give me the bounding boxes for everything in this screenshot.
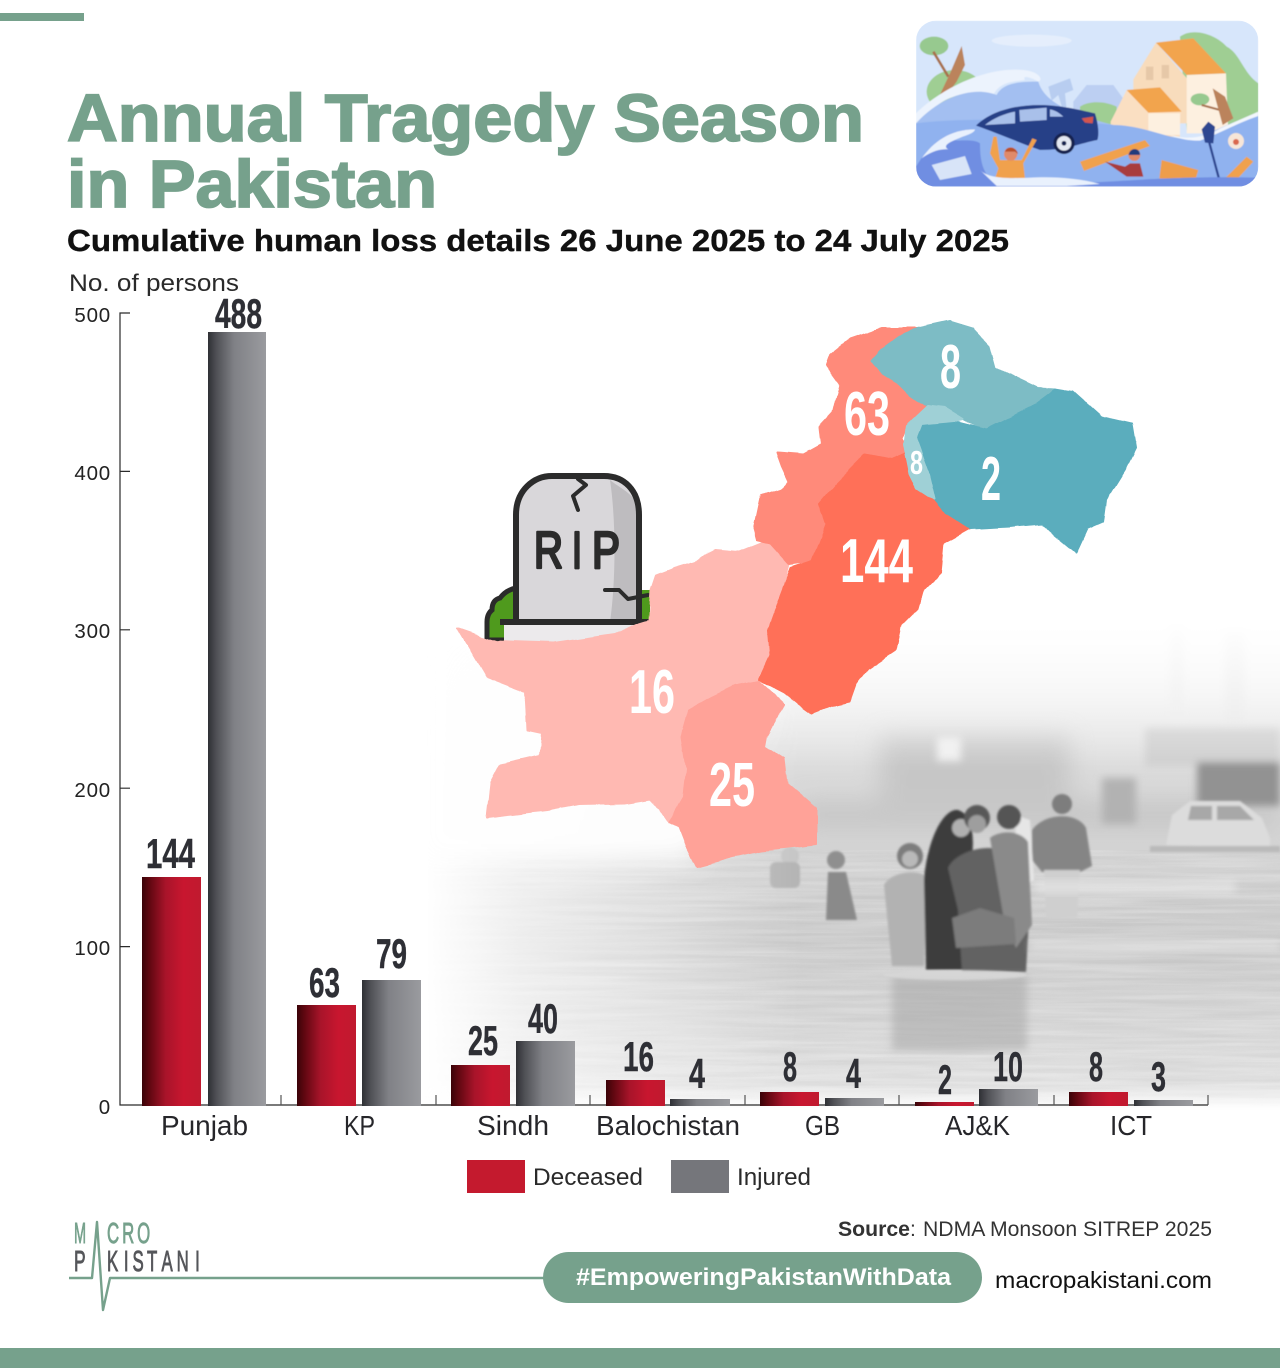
logo: Macro Pakistani with pulse line: P: [74, 1246, 86, 1278]
bar chart: value labels: 4: [846, 1050, 861, 1097]
photo: blurred trees and street: [800, 735, 1280, 830]
bar chart: category labels: AJ&K: [945, 1110, 1010, 1141]
bar chart: value labels: [146, 290, 1166, 1103]
subtitle: Cumulative human loss details 26 June 2025 to 24 July 2025: [67, 223, 1009, 258]
bar chart: category labels: [161, 1110, 1152, 1141]
bar chart: category labels: GB: [805, 1110, 840, 1141]
bar chart: value labels: 488: [215, 290, 262, 337]
logo: Macro Pakistani with pulse line: CRO: [107, 1219, 150, 1250]
logo: Macro Pakistani with pulse line: [69, 1216, 545, 1310]
bar chart: value labels: 79: [376, 930, 407, 977]
legend: Deceased: [533, 1164, 643, 1191]
icon: flood illustration: [916, 21, 1258, 187]
title: Annual Tragedy Season: [67, 81, 864, 156]
logo: Macro Pakistani with pulse line: M: [74, 1216, 86, 1249]
map values: 144: [840, 527, 913, 596]
bar chart: value labels: 2: [938, 1056, 952, 1103]
y axis title: No. of persons: [69, 270, 239, 297]
y axis tick labels: 100: [74, 937, 111, 960]
map region: Islamabad Capital Territory: [906, 408, 965, 501]
photo: water reflection: [892, 975, 1027, 1050]
map region: Khyber Pakhtunkhwa: [756, 330, 929, 566]
map region: Balochistan: [459, 541, 791, 823]
title: in Pakistan: [67, 147, 437, 222]
bar chart: category labels: Punjab: [161, 1110, 248, 1141]
legend: Injured: [737, 1164, 811, 1191]
map values: 63: [844, 380, 890, 449]
icon: RIP gravestone: I: [572, 522, 582, 580]
map values: 16: [629, 658, 675, 727]
bar chart: value labels: 3: [1151, 1053, 1166, 1100]
photo: shopfront: [934, 728, 1280, 826]
bar chart: value labels: 63: [309, 959, 340, 1006]
bar chart: category labels: ICT: [1110, 1110, 1152, 1141]
legend: [467, 1160, 811, 1193]
map region: Punjab: [761, 454, 972, 715]
map values: 25: [709, 751, 755, 820]
bar chart: value labels: 144: [146, 830, 195, 877]
map region: Gilgit-Baltistan: [873, 323, 1057, 431]
photo: parked car: [1150, 801, 1280, 852]
bar chart: value labels: 16: [623, 1033, 654, 1080]
bar chart: bars: [142, 332, 1193, 1106]
hashtag pill: #EmpoweringPakistanWithData: [576, 1264, 952, 1291]
bar chart: value labels: 40: [528, 995, 558, 1042]
y axis tick labels: 300: [74, 620, 111, 643]
photo: people wading: [770, 794, 1092, 972]
white fade over upper-left of photo: [420, 620, 790, 860]
y axis tick labels: 0: [99, 1096, 111, 1119]
bar chart: category labels: KP: [344, 1110, 375, 1141]
bar chart: value labels: 8: [1089, 1043, 1103, 1090]
icon: RIP gravestone: P: [592, 522, 620, 580]
hashtag pill: [543, 1252, 982, 1303]
source note: NDMA Monsoon SITREP 2025: [923, 1218, 1212, 1241]
map region: Azad Jammu and Kashmir: [917, 391, 1137, 554]
source note: Source:: [838, 1218, 916, 1241]
map values: 2: [981, 445, 1001, 514]
bar chart: value labels: 25: [468, 1017, 498, 1064]
website: macropakistani.com: [995, 1267, 1212, 1293]
bar chart: value labels: 10: [993, 1043, 1023, 1090]
logo: Macro Pakistani with pulse line: KISTANI: [107, 1247, 200, 1278]
map of Pakistan: [459, 323, 1137, 868]
map values: 8: [940, 333, 961, 402]
map values: [629, 333, 1001, 820]
title: [67, 81, 864, 222]
chart: vertical axis, horizontal axis and ticks: [120, 313, 1208, 1105]
y axis tick labels: 400: [74, 462, 111, 485]
bar chart: value labels: 8: [783, 1043, 797, 1090]
background photo: flooded street in greyscale: [468, 670, 1280, 1103]
icon: RIP gravestone: R: [534, 522, 563, 580]
top accent bar: [0, 13, 84, 21]
map values: 8: [910, 444, 923, 481]
map region: Sindh: [671, 683, 818, 868]
y axis tick labels: [74, 304, 111, 1119]
icon: RIP gravestone: [487, 476, 650, 644]
bottom bar: [0, 1348, 1280, 1368]
y axis tick labels: 500: [74, 304, 111, 327]
bar chart: category labels: Sindh: [477, 1110, 549, 1141]
y axis tick labels: 200: [74, 779, 111, 802]
bar chart: value labels: 4: [689, 1050, 705, 1097]
bar chart: category labels: Balochistan: [596, 1110, 740, 1141]
